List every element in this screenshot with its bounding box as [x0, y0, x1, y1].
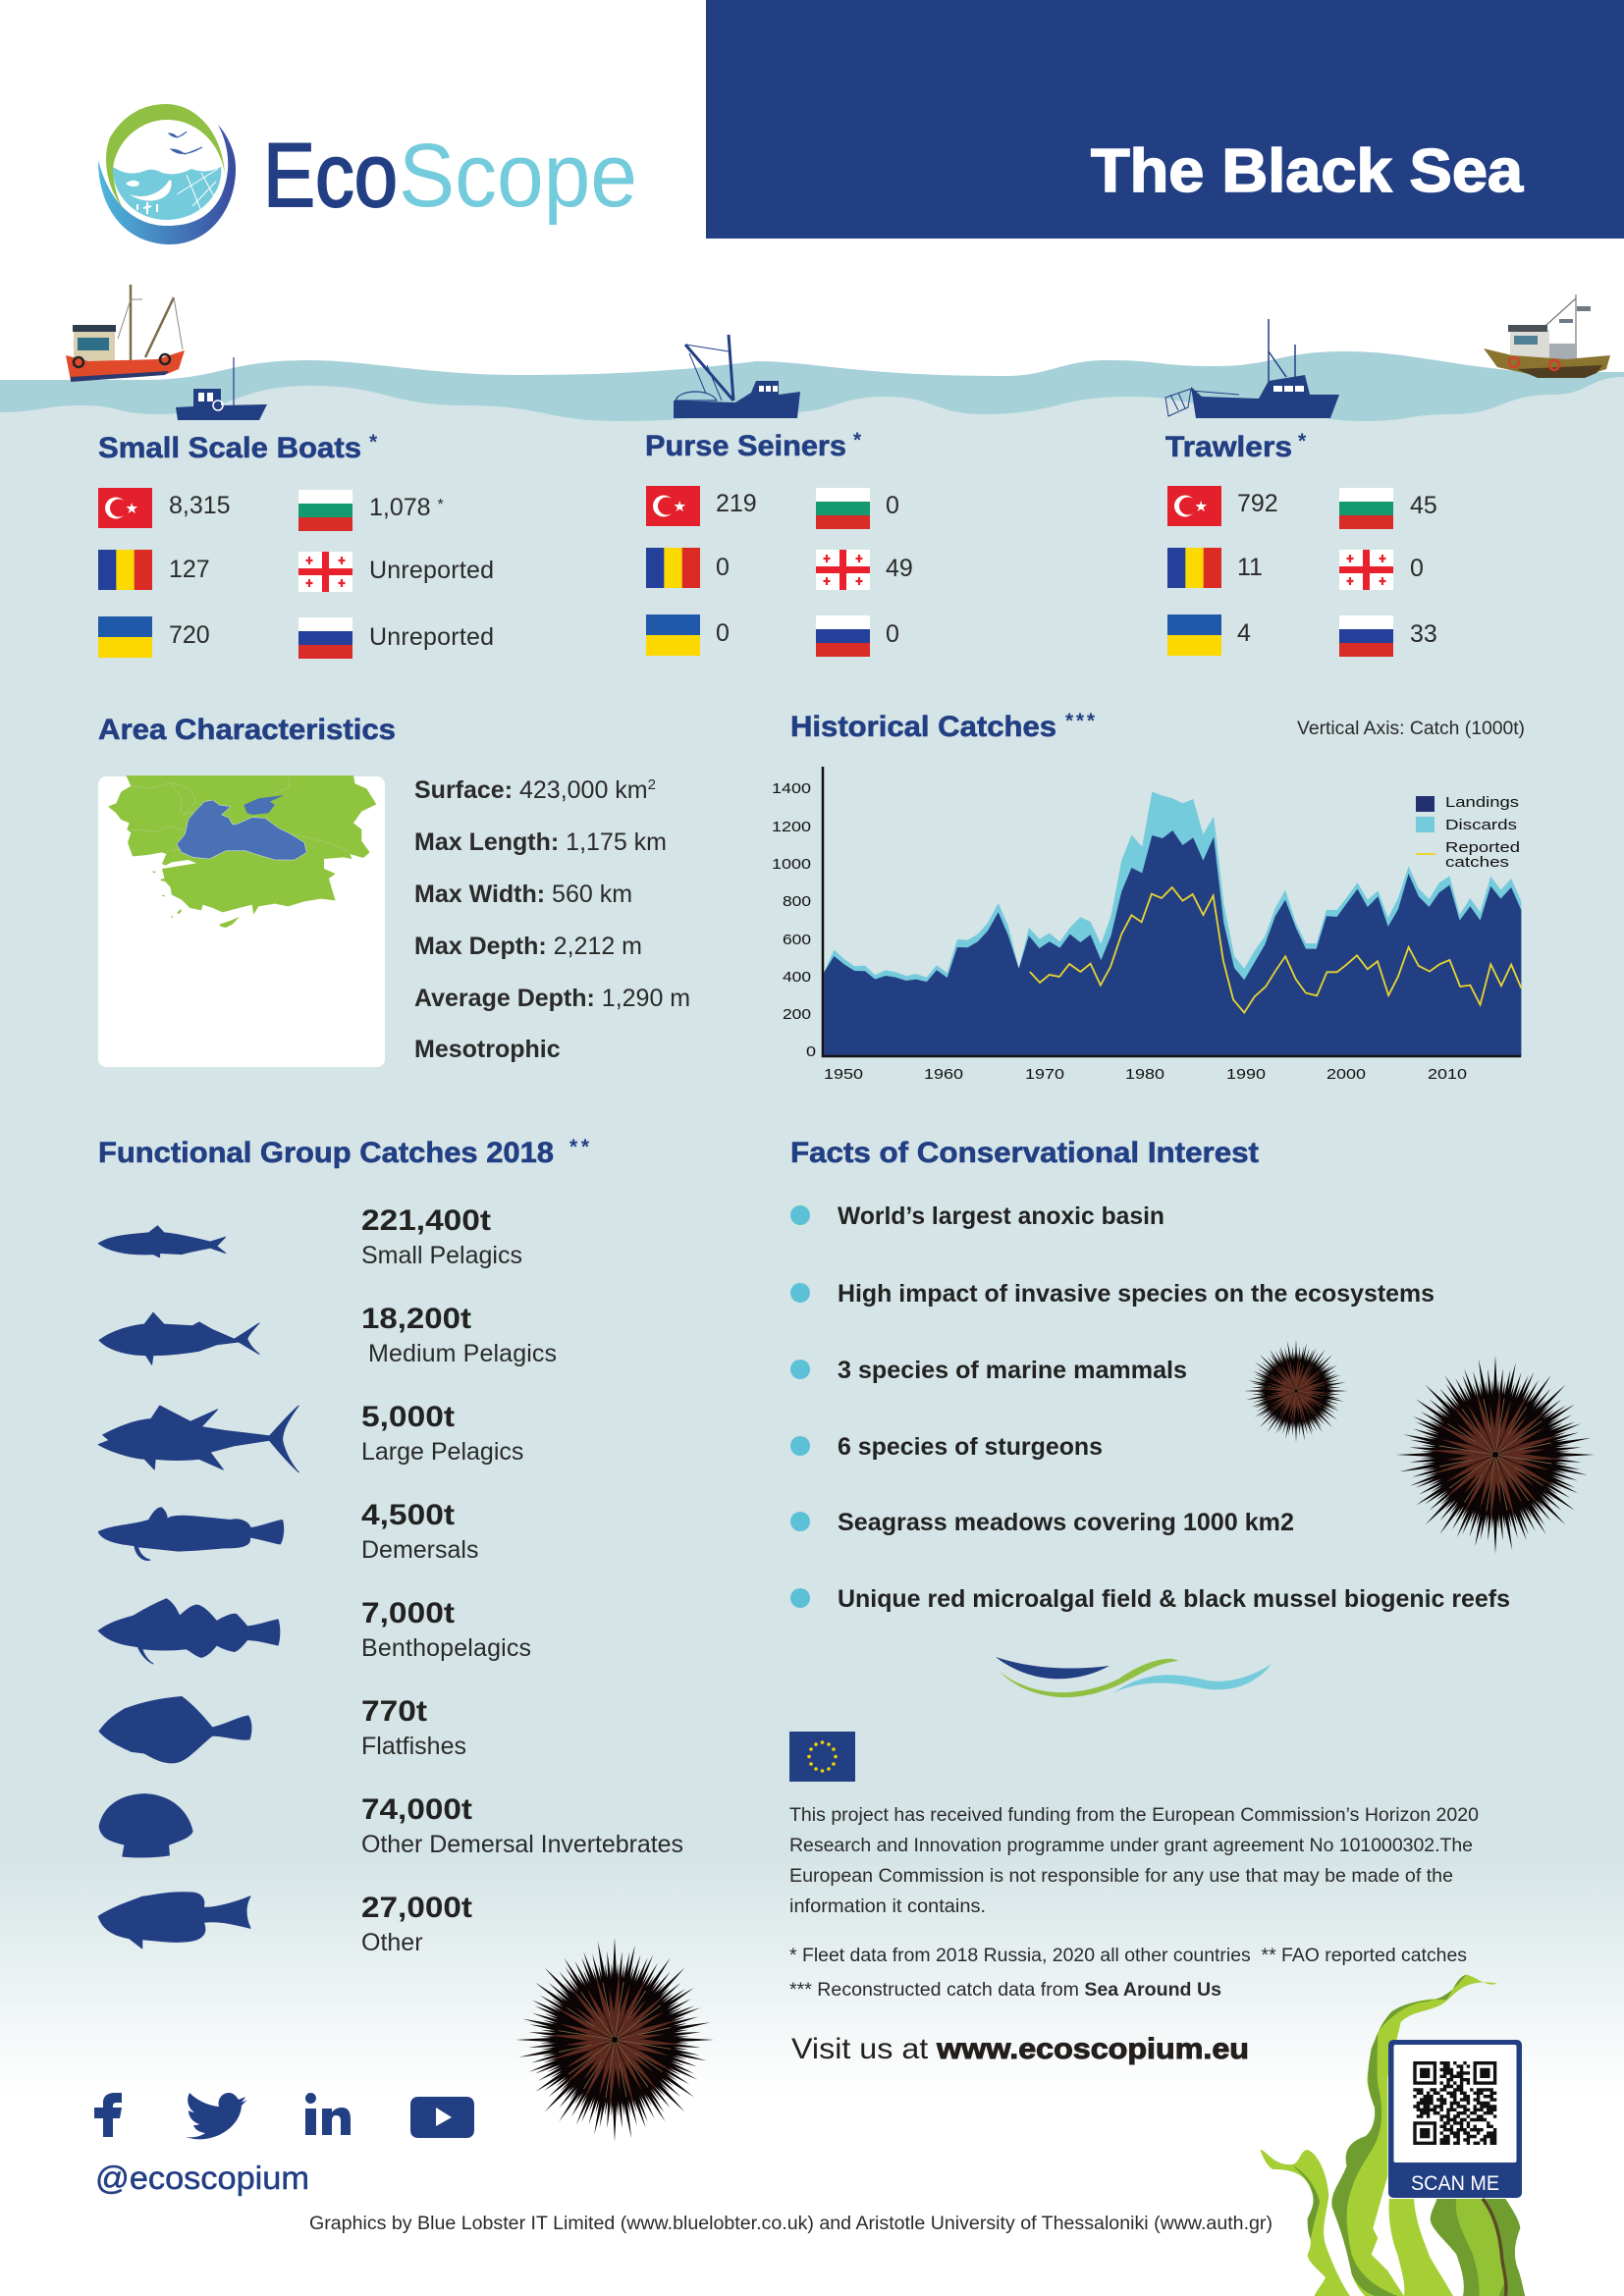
heading: facts: Facts of Conservational Interest: [790, 1137, 1259, 1169]
other value: [361, 1892, 472, 1956]
large pelagics value: 5,000t: [361, 1401, 455, 1433]
heading: trawlers: Trawlers: [1165, 431, 1292, 463]
funding statement: European Commission is not responsible for any use that may be made of the: [789, 1866, 1453, 1887]
QR code: [1413, 2061, 1496, 2145]
landings area: [824, 830, 1521, 1057]
icon: flatfish: [99, 1697, 251, 1763]
heading: trawlers: *: [1298, 430, 1307, 453]
icon: benthopelagic fish: [98, 1599, 280, 1664]
Romania small scale: 127: [169, 556, 210, 583]
area facts: Max Length: 1,175 km: [414, 828, 667, 856]
Russia trawlers: 33: [1410, 620, 1437, 648]
Turkey small scale: [98, 488, 231, 528]
heading: historical catches: Historical Catches: [790, 711, 1056, 743]
large pelagics value: Large Pelagics: [361, 1438, 523, 1466]
icon: EU flag: [789, 1732, 855, 1782]
panel: area characteristics: [98, 714, 690, 1067]
social handle: @ecoscopium: [95, 2160, 309, 2196]
Bulgaria small scale: *: [438, 497, 444, 513]
Ukraine purse seiners: [646, 614, 730, 656]
other value: Other: [361, 1929, 423, 1956]
footnotes: [789, 1946, 1467, 2001]
reported catches line: [1030, 887, 1521, 1013]
Ukraine trawlers: [1167, 614, 1251, 656]
chart legend: catches: [1445, 854, 1509, 871]
small pelagics value: Small Pelagics: [361, 1242, 522, 1269]
Romania small scale: [98, 550, 210, 590]
social icons: [94, 2093, 474, 2139]
icon: twitter: [186, 2093, 247, 2139]
x axis labels: 2010: [1428, 1066, 1467, 1083]
seaweed: [1260, 1975, 1525, 2296]
icon: large pelagic fish: [98, 1406, 298, 1472]
fact 1: World’s largest anoxic basin: [838, 1202, 1164, 1230]
ship: trawler: [1165, 319, 1339, 418]
Russia purse seiners: 0: [886, 620, 899, 648]
icon: small sea urchin: [1237, 1332, 1355, 1450]
QR card: [1388, 2040, 1522, 2198]
other demersal invertebrates value: [361, 1793, 683, 1858]
heading: purse seiners: Purse Seiners: [645, 430, 846, 462]
medium pelagics value: Medium Pelagics: [368, 1340, 557, 1367]
heading: area characteristics: Area Characteristics: [98, 714, 396, 746]
funding statement: information it contains.: [789, 1896, 986, 1917]
Georgia trawlers: 0: [1410, 555, 1424, 582]
panel: trawlers: [1165, 430, 1437, 657]
funding statement: [789, 1805, 1479, 1917]
heading: small scale boats: *: [369, 431, 378, 454]
back wave: [0, 351, 1624, 442]
area facts: Max Depth: 2,212 m: [414, 933, 642, 960]
other demersal invertebrates value: Other Demersal Invertebrates: [361, 1831, 683, 1858]
fish silhouettes: [98, 1226, 298, 1949]
y axis labels: 400: [783, 969, 811, 986]
area facts: [414, 776, 690, 1063]
demersals value: 4,500t: [361, 1499, 455, 1531]
Romania purse seiners: 0: [716, 554, 730, 581]
header band: [706, 0, 1624, 239]
small pelagics value: [361, 1204, 522, 1269]
y axis labels: 0: [806, 1043, 816, 1060]
logo: EcoScope: Scope: [399, 126, 637, 226]
Turkey purse seiners: 219: [716, 490, 757, 517]
fact 5: Seagrass meadows covering 1000 km2: [838, 1509, 1294, 1536]
panel: small scale boats: [98, 431, 494, 659]
demersals value: [361, 1499, 478, 1564]
fact 4: 6 species of sturgeons: [838, 1433, 1103, 1461]
Russia purse seiners: [816, 615, 899, 657]
axis note: Vertical Axis: Catch (1000t): [1297, 719, 1525, 739]
icon: large sea urchin: [1382, 1342, 1608, 1568]
area facts: 2: [648, 776, 656, 793]
Bulgaria purse seiners: [816, 488, 899, 529]
Bulgaria trawlers: 45: [1410, 492, 1437, 519]
ship: purse seiner: [674, 335, 800, 418]
heading: functional group catches: **: [569, 1136, 590, 1158]
medium pelagics value: 18,200t: [361, 1303, 471, 1335]
Romania purse seiners: [646, 548, 730, 588]
small pelagics value: 221,400t: [361, 1204, 491, 1237]
Ukraine trawlers: 4: [1237, 619, 1251, 647]
Bulgaria small scale: [298, 490, 444, 531]
icon: bottom sea urchin: [502, 1924, 728, 2156]
funding statement: This project has received funding from the European Commission’s Horizon 2020: [789, 1805, 1479, 1826]
area chart: [823, 767, 1521, 1057]
icon: linkedin: [305, 2093, 351, 2135]
Russia small scale: [298, 617, 494, 659]
map card: [98, 775, 385, 1067]
Bulgaria small scale: 1,078: [369, 494, 431, 521]
Georgia trawlers: [1339, 550, 1424, 590]
Georgia small scale: [298, 552, 494, 592]
icon: youtube: [410, 2097, 474, 2138]
x axis labels: 1950: [824, 1066, 863, 1083]
other demersal invertebrates value: 74,000t: [361, 1793, 472, 1826]
fact 2: High impact of invasive species on the ecosystems: [838, 1280, 1435, 1308]
Romania trawlers: [1167, 548, 1263, 588]
Turkey small scale: 8,315: [169, 492, 231, 519]
fact 6: Unique red microalgal field & black mussel biogenic reefs: [838, 1585, 1510, 1613]
y axis labels: 600: [783, 932, 811, 948]
scan me label: SCAN ME: [1411, 2172, 1499, 2195]
y axis labels: [772, 780, 816, 1060]
icon: small pelagic fish: [98, 1226, 226, 1257]
Turkey purse seiners: [646, 486, 757, 526]
area facts: Average Depth: 1,290 m: [414, 985, 690, 1012]
Bulgaria trawlers: [1339, 488, 1437, 529]
discards area: [824, 792, 1521, 1057]
icon: other fish: [98, 1893, 250, 1949]
icon: demersal fish: [98, 1508, 284, 1560]
icon: medium pelagic fish: [99, 1312, 259, 1364]
area facts: Mesotrophic: [414, 1036, 561, 1063]
y axis labels: 1000: [772, 856, 811, 873]
Russia trawlers: [1339, 615, 1437, 657]
chart legend: Discards: [1445, 817, 1517, 833]
heading: historical catches: ***: [1065, 710, 1096, 732]
panel: historical catches: [772, 710, 1525, 1083]
other value: 27,000t: [361, 1892, 472, 1924]
Bulgaria purse seiners: 0: [886, 492, 899, 519]
Ukraine small scale: 720: [169, 621, 210, 649]
Ukraine small scale: [98, 616, 210, 658]
x axis labels: 1960: [924, 1066, 963, 1083]
y axis labels: 200: [783, 1006, 811, 1023]
x axis labels: 1990: [1226, 1066, 1266, 1083]
Russia small scale: Unreported: [369, 623, 494, 651]
chart legend: Landings: [1445, 794, 1519, 811]
credits: Graphics by Blue Lobster IT Limited (www.bluelobter.co.uk) and Aristotle University of Thessaloniki (www.auth.gr): [309, 2214, 1272, 2234]
panel: facts of conservational interest: [790, 1137, 1510, 1613]
area facts: Surface: 423,000 km: [414, 776, 648, 804]
flatfishes value: 770t: [361, 1695, 427, 1728]
large pelagics value: [361, 1401, 523, 1466]
title: The Black Sea: [1091, 137, 1524, 205]
heading: functional group catches: Functional Group Catches 2018: [98, 1137, 554, 1169]
benthopelagics value: Benthopelagics: [361, 1634, 531, 1662]
footnotes: * Fleet data from 2018 Russia, 2020 all other countries ** FAO reported catches: [789, 1946, 1467, 1966]
Ukraine purse seiners: 0: [716, 619, 730, 647]
footnotes: *** Reconstructed catch data from Sea Around Us: [789, 1980, 1221, 2001]
x axis labels: 1970: [1025, 1066, 1064, 1083]
panel: purse seiners: [645, 429, 913, 657]
y axis labels: 1400: [772, 780, 811, 797]
flatfishes value: [361, 1695, 466, 1760]
benthopelagics value: [361, 1597, 531, 1662]
x axis labels: 1980: [1125, 1066, 1164, 1083]
Turkey trawlers: 792: [1237, 490, 1278, 517]
medium pelagics value: [361, 1303, 557, 1367]
heading: small scale boats: Small Scale Boats: [98, 432, 361, 464]
logo wordmark: Eco: [263, 126, 398, 226]
x axis labels: 2000: [1326, 1066, 1366, 1083]
Turkey trawlers: [1167, 486, 1278, 526]
x axis labels: [824, 1066, 1467, 1083]
benthopelagics value: 7,000t: [361, 1597, 455, 1629]
ship: red fishing boat: [66, 285, 185, 382]
area facts: Max Width: 560 km: [414, 881, 632, 908]
fact 3: 3 species of marine mammals: [838, 1357, 1187, 1384]
decorative logo waves: [996, 1657, 1272, 1697]
ship: brown boat: [1484, 294, 1610, 378]
funding statement: Research and Innovation programme under grant agreement No 101000302.The: [789, 1836, 1473, 1856]
y axis labels: 1200: [772, 819, 811, 835]
icon: facebook: [94, 2093, 122, 2137]
Georgia small scale: Unreported: [369, 557, 494, 584]
website link: Visit us at www.ecoscopium.eu: [791, 2033, 1249, 2065]
Romania trawlers: 11: [1237, 554, 1263, 581]
demersals value: Demersals: [361, 1536, 478, 1564]
Georgia purse seiners: 49: [886, 555, 913, 582]
Georgia purse seiners: [816, 550, 913, 590]
y axis labels: 800: [783, 893, 811, 910]
panel: functional group catches: [98, 1136, 683, 1956]
ship: small scale boat: [176, 357, 267, 420]
chart legend: Reported: [1445, 839, 1520, 856]
chart legend: [1416, 794, 1520, 871]
logo: EcoScope: [98, 104, 637, 244]
icon: shell: [99, 1794, 192, 1857]
heading: purse seiners: *: [853, 429, 862, 452]
flatfishes value: Flatfishes: [361, 1733, 466, 1760]
